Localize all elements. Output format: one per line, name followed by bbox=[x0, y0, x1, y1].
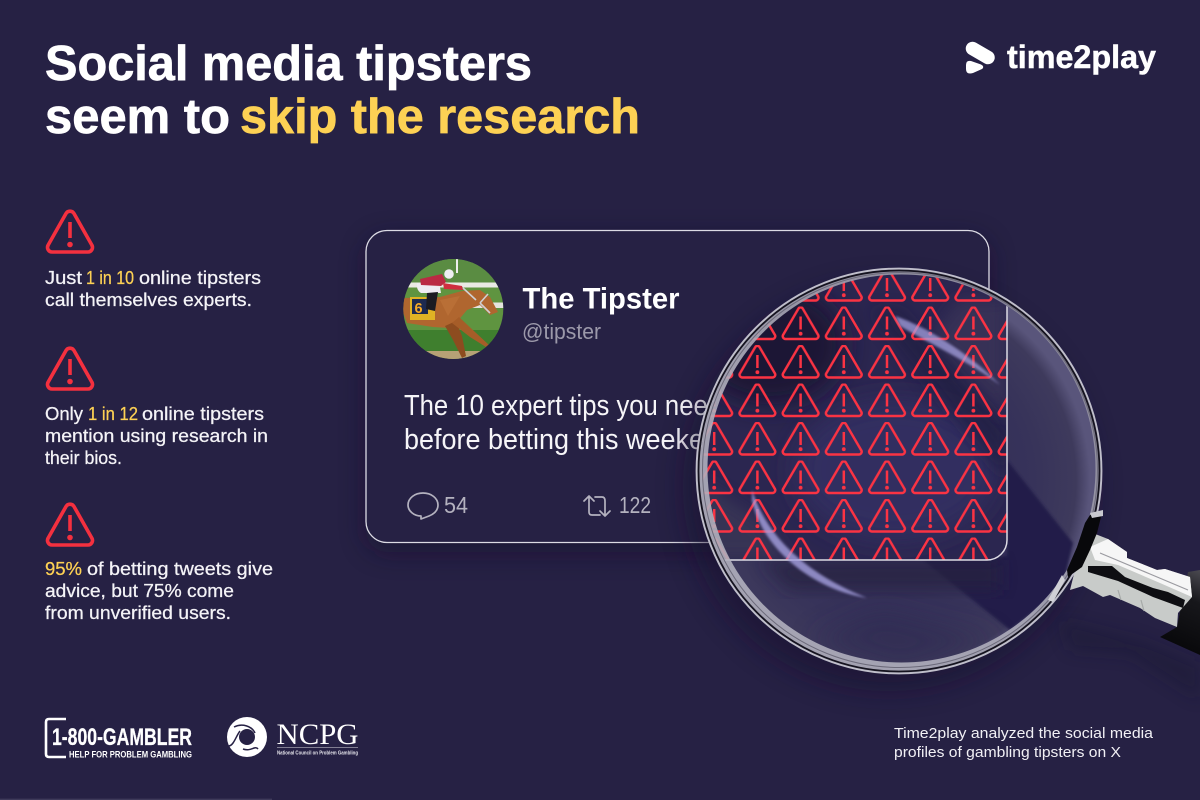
icon: NCPG swirl bbox=[227, 717, 267, 757]
stat 2: mention using research in bbox=[45, 426, 268, 446]
logo: NCPG: NCPG bbox=[276, 718, 358, 751]
avatar: jockey on racehorse: 6 bbox=[414, 301, 423, 317]
icon: comment bbox=[408, 493, 438, 519]
title bbox=[45, 37, 640, 144]
stat 1: Just bbox=[45, 268, 82, 288]
stat 1: online tipsters bbox=[139, 268, 261, 288]
logo: 1-800-GAMBLER: HELP FOR PROBLEM GAMBLING bbox=[69, 750, 192, 760]
stat 1 bbox=[45, 211, 261, 310]
comment count: 54 bbox=[444, 492, 468, 518]
stat 3: of betting tweets give bbox=[87, 559, 273, 579]
tweet text: before betting this weekend bbox=[404, 424, 734, 456]
handle bbox=[1070, 530, 1200, 655]
name: The Tipster bbox=[522, 282, 680, 316]
logo: 1-800-GAMBLER bbox=[46, 719, 192, 760]
stat 2: 1 in 12 bbox=[88, 404, 138, 424]
source note bbox=[894, 726, 1154, 761]
lens glare bbox=[752, 316, 1000, 598]
retweet count: 122 bbox=[619, 492, 651, 518]
lens shading bbox=[760, 460, 1073, 670]
stat 1: 1 in 10 bbox=[86, 268, 134, 288]
logo: NCPG bbox=[227, 717, 358, 757]
icon: warning triangle 2 bbox=[48, 348, 92, 389]
lens rim bbox=[696, 268, 1102, 674]
warning triangle pattern bbox=[703, 274, 1006, 560]
title: skip the research bbox=[240, 90, 640, 144]
stat 1: call themselves experts. bbox=[45, 290, 252, 310]
title: seem to bbox=[45, 90, 230, 144]
rim collar bbox=[1048, 510, 1103, 602]
tweet text: The 10 expert tips you need bbox=[404, 390, 722, 422]
stat 3 bbox=[45, 504, 273, 623]
icon: warning triangle 1 bbox=[48, 211, 92, 252]
magnified card bbox=[703, 274, 1008, 561]
stat 2: online tipsters bbox=[142, 404, 264, 424]
avatar: jockey on racehorse bbox=[403, 259, 504, 359]
stat 2: Only bbox=[45, 404, 83, 424]
lens glass bbox=[701, 273, 1097, 669]
card glass tones bbox=[695, 285, 1007, 560]
logo: NCPG: National Council on Problem Gambling bbox=[277, 750, 358, 756]
title: Social media tipsters bbox=[45, 37, 532, 91]
magnifying glass bbox=[668, 268, 1200, 691]
icon: warning triangle 3 bbox=[48, 504, 92, 545]
handle: @tipster bbox=[522, 319, 601, 344]
lens drop shadow bbox=[683, 283, 1095, 691]
handle shadow bbox=[1060, 620, 1200, 700]
logo: time2play: time2play bbox=[1007, 39, 1156, 75]
stat 2: their bios. bbox=[45, 448, 122, 468]
tweet text bbox=[404, 390, 734, 456]
icon: phone outline bbox=[46, 719, 66, 757]
icon: retweet bbox=[584, 496, 610, 516]
tweet card bbox=[366, 230, 989, 552]
stat 3: advice, but 75% come bbox=[45, 581, 234, 601]
source note: profiles of gambling tipsters on X bbox=[894, 745, 1121, 761]
logo: 1-800-GAMBLER: 1-800-GAMBLER bbox=[52, 724, 192, 751]
stat 3: from unverified users. bbox=[45, 603, 231, 623]
source note: Time2play analyzed the social media bbox=[894, 726, 1154, 742]
stat 3: 95% bbox=[45, 559, 82, 579]
stat 2 bbox=[45, 348, 268, 468]
